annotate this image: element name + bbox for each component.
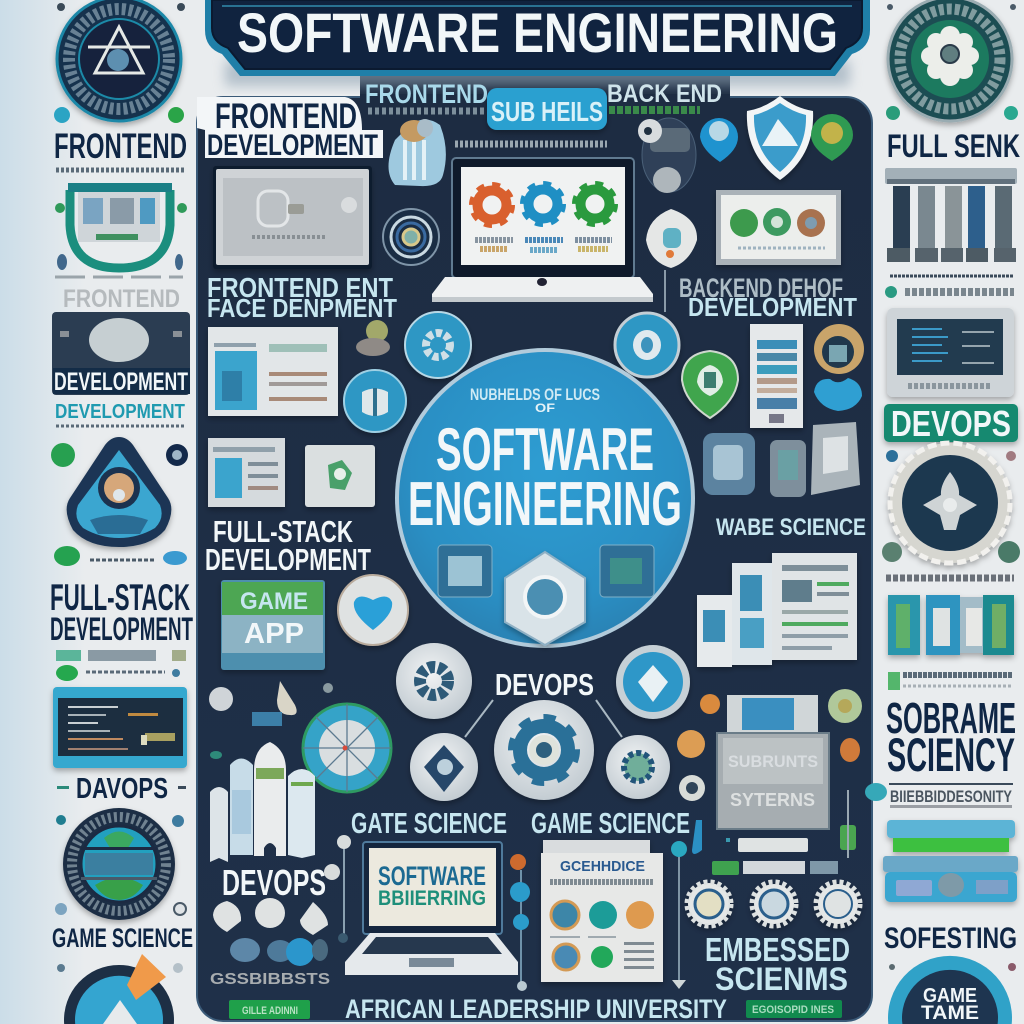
icon: globe [303, 704, 391, 792]
right column: game tame badge [888, 956, 1016, 1024]
main dark panel [197, 97, 872, 1021]
panel: game app card: GAME [240, 588, 308, 615]
right column: stacked blue panels [883, 820, 1018, 902]
right column: flower badge [890, 443, 1010, 563]
icon: blue figure [388, 119, 446, 186]
heading: frontend development label [197, 97, 383, 162]
icon: green pin [811, 114, 853, 161]
circle small heading: NUBHELDS OF LUCS [470, 385, 600, 404]
heading: gate science: GATE SCIENCE [351, 808, 507, 840]
heading: devops left: DEVOPS [222, 862, 326, 903]
laptop: software engineering: SOFTWARE [378, 861, 486, 891]
strip of small grey text: GSSBIBBSTS [210, 971, 330, 988]
right column: text strip [886, 574, 1014, 582]
sub-heading pill [487, 88, 607, 130]
icon: gears row [687, 882, 860, 926]
left column: wheel side dots [55, 815, 186, 915]
heading: full-stack development: FULL-STACK [213, 514, 353, 549]
heading: frontend development label: DEVELOPMENT [207, 129, 378, 162]
green button left: GILLE ADINNI [242, 1005, 298, 1017]
icon: blue circle gear [405, 312, 471, 378]
icon: shield [747, 96, 813, 180]
heading: frontend end: FRONTEND ENT [207, 272, 393, 303]
icon: rockets [210, 742, 315, 862]
heading: frontend end [207, 272, 397, 323]
heading: embedded systems: EMBESSED [705, 931, 850, 968]
circle small heading [470, 385, 600, 415]
icon: blue blob [814, 378, 862, 411]
document: badges sheet [541, 840, 663, 982]
title banner [205, 0, 870, 86]
icons: small nodes left [209, 681, 333, 759]
circle title: SOFTWARE [436, 416, 654, 483]
icon: white circle spiral [410, 733, 478, 801]
right column: badge side dots [882, 450, 1020, 563]
icons: small orange nodes right [677, 689, 862, 850]
left column: code panel [53, 687, 187, 768]
left column: development card: DEVELOPMENT [54, 368, 188, 396]
left column: monitor arc [55, 183, 187, 277]
right column: small strips [885, 276, 1014, 298]
heading: embedded systems: SCIENMS [715, 961, 848, 997]
right column: tab on panel edge [865, 783, 887, 801]
green button right [746, 1000, 842, 1018]
left column: triangle icon [67, 437, 171, 547]
panel: game app card [221, 580, 325, 670]
circle centre shield [505, 552, 585, 645]
gear orange [472, 184, 512, 226]
icon: hooded dark figure [638, 118, 696, 193]
stacked report pages [697, 553, 857, 667]
circle right tile [600, 545, 654, 597]
icons: glass tiles right [703, 422, 860, 497]
icon: white gear circle top left [396, 643, 472, 719]
icon: heart [338, 575, 408, 645]
panel: small card left [208, 438, 285, 507]
heading: embedded systems [705, 931, 850, 997]
label: devops centre: DEVOPS [495, 667, 594, 702]
left column: teal development: DEVELOPMENT [55, 401, 185, 423]
left column: pie badge [57, 954, 183, 1024]
circle small heading: OF [535, 401, 555, 415]
timeline left of laptop [324, 835, 351, 943]
panel: web card [208, 327, 338, 416]
document stripes [750, 324, 803, 428]
left column: triangle side dots [51, 443, 188, 566]
left column: frontend label: FRONTEND [54, 127, 187, 166]
panel: frontend wireframe card [213, 166, 372, 269]
right column: game tame badge: TAME [921, 1003, 979, 1024]
left column: badge [57, 0, 181, 121]
right column: sobrame sciency label [886, 694, 1016, 781]
left pale-blue wash [0, 0, 85, 1024]
left column: full stack label [50, 577, 193, 647]
right column: four panels [888, 595, 1014, 655]
panel: small card right [305, 445, 375, 507]
panel: three badges card [716, 190, 841, 265]
left column: wheel badge [63, 808, 175, 920]
gear blue [522, 184, 564, 224]
left column: game science label: GAME SCIENCE [52, 923, 193, 953]
icon: white blue star circle [616, 645, 690, 719]
laptop with three gears [432, 158, 653, 302]
strip of small text [455, 140, 607, 148]
icons: devops nodes [213, 898, 328, 966]
icon: spiral medallion [383, 209, 439, 265]
left column: small strips [56, 650, 186, 681]
left column: development card [52, 312, 190, 396]
small label chips [712, 838, 838, 875]
vertical connector right [847, 790, 849, 858]
left column: full stack label: DEVELOPMENT [50, 611, 193, 647]
heading: frontend end: FACE DENPMENT [207, 293, 397, 323]
icon: white circle teal flower [606, 735, 670, 799]
subheading: frontend small: FRONTEND [365, 79, 488, 109]
panel: embedded systems card: SYTERNS [730, 790, 815, 810]
sub-heading pill: SUB HEILS [491, 96, 603, 127]
left column: davops label: DAVOPS [76, 773, 168, 805]
footer text: AFRICAN LEADERSHIP UNIVERSITY [345, 994, 727, 1024]
right column: pillars [885, 168, 1017, 262]
subheading: back end small: BACK END [607, 80, 722, 108]
icon: blue circle cloud [615, 313, 679, 377]
timeline with cyan node [671, 820, 702, 989]
connector lines [465, 700, 622, 737]
right column: monitor [887, 308, 1014, 397]
icon: blue pin [700, 118, 738, 162]
heading: backend development: BACKEND DEHOF [679, 273, 843, 303]
heading: wabe science: WABE SCIENCE [716, 514, 866, 541]
gear green [574, 184, 616, 224]
left column: full stack label: FULL-STACK [50, 577, 190, 618]
heading: backend development: DEVELOPMENT [688, 292, 857, 322]
icon: large gear circle [494, 700, 594, 800]
right column: badge [888, 0, 1012, 121]
connector line [664, 270, 666, 312]
green button left [229, 1000, 310, 1019]
left column: dots [54, 3, 185, 123]
heading: full-stack development [205, 514, 371, 577]
central circle [395, 348, 695, 648]
icon: small figure [356, 320, 390, 356]
right column: dots [886, 4, 1018, 120]
timeline right of laptop [510, 854, 530, 991]
icon: white node [646, 209, 697, 268]
panel: embedded systems card [717, 695, 829, 829]
green button right: EGOISOPID INES [752, 1004, 834, 1016]
document: badges sheet: GCEHHDICE [560, 858, 645, 875]
circle left tile [438, 545, 492, 597]
central circle: ENGINEERING [408, 470, 682, 539]
right column: small strip [888, 672, 1012, 690]
left column: faded frontend label: FRONTEND [63, 285, 180, 313]
panel: embedded systems card: SUBRUNTS [728, 752, 818, 771]
laptop: software engineering [345, 842, 518, 975]
title text: SOFTWARE ENGINEERING [237, 1, 838, 64]
panel: game app card: APP [244, 618, 304, 650]
heading: full-stack development: DEVELOPMENT [205, 542, 371, 577]
icon: blue circle puzzle [344, 370, 406, 432]
heading: backend development [679, 273, 857, 322]
heading: game science: GAME SCIENCE [531, 808, 690, 840]
right column: game tame badge: GAME [923, 985, 977, 1007]
panel upper extension under banner [360, 70, 730, 110]
icon: round picture [814, 324, 864, 374]
heading: frontend development label: FRONTEND [215, 97, 357, 136]
laptop: software engineering: BBIIERRING [378, 887, 486, 910]
icon: green shield [682, 351, 738, 418]
